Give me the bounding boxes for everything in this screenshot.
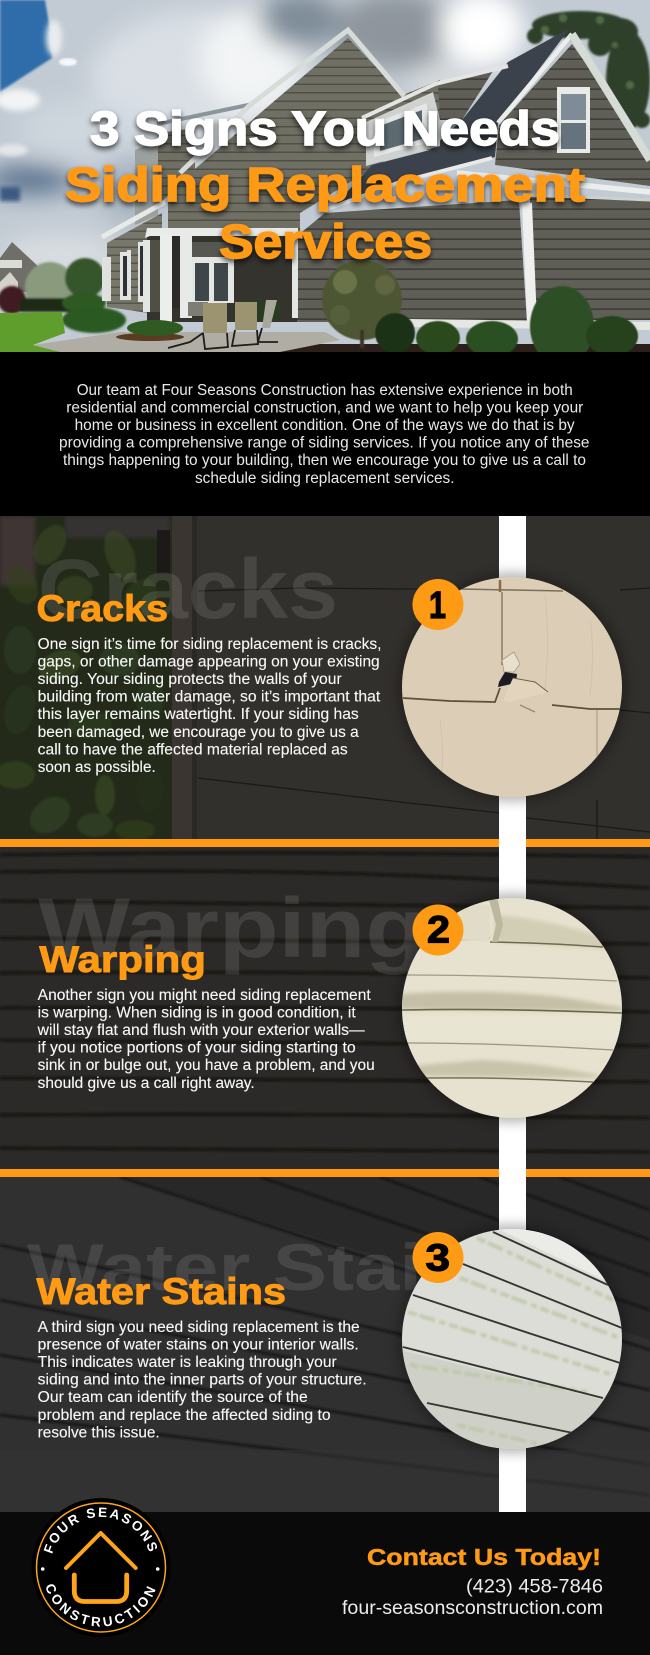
ghost heading: Warping: Warping xyxy=(38,881,425,975)
ghost heading: Water Stains: Water Stains xyxy=(27,1230,517,1304)
text block: cracks body: siding. Your siding protects the walls of your xyxy=(38,671,342,688)
text block: warping body: should give us a call right away. xyxy=(38,1075,255,1092)
text block: cracks body: One sign it’s time for siding replacement is cracks, xyxy=(38,636,381,653)
right gable wall xyxy=(495,44,650,186)
panel: cracks background xyxy=(0,516,650,841)
title: Services xyxy=(219,216,432,269)
panel: intro: Our team at Four Seasons Construction has extensive experience in both xyxy=(77,382,573,399)
lower left wall xyxy=(107,213,162,315)
background trees and shrubs xyxy=(0,258,126,333)
panel: intro: residential and commercial construction, and we want to help you keep your xyxy=(66,400,583,416)
orange divider 2 xyxy=(0,1169,650,1177)
text block: warping body: sink in or bulge out, you have a problem, and you xyxy=(38,1057,375,1074)
logo: Four Seasons Construction: CONSTRUCTION xyxy=(46,1584,156,1627)
text block: warping body xyxy=(37,987,375,1092)
text block: cracks body: gaps, or other damage appearing on your existing xyxy=(38,654,380,671)
text block: cracks body: this layer remains watertight. If your siding has xyxy=(38,706,359,723)
number badge 2: 2 xyxy=(427,910,450,952)
logo: Four Seasons Construction xyxy=(32,1498,170,1637)
text block: cracks body xyxy=(38,636,381,776)
porch xyxy=(102,228,298,322)
number badge 1: 1 xyxy=(429,585,446,627)
upper left wing wall and roofline xyxy=(135,104,253,225)
number badge 1 xyxy=(412,579,464,630)
panel: footer xyxy=(0,1512,650,1655)
landscaping shrubs xyxy=(322,260,639,352)
panel: intro: providing a comprehensive range of siding services. If you notice any of these xyxy=(59,435,590,452)
dormer front and window xyxy=(366,92,440,166)
number badge 3: 3 xyxy=(426,1238,450,1280)
dormer wall xyxy=(438,72,493,120)
panel: warping background xyxy=(0,847,650,1169)
title: Siding Replacement xyxy=(65,159,585,212)
icon: house xyxy=(66,1533,136,1602)
panel: cracks text xyxy=(36,588,381,776)
text block: water stains body: siding and into the inner parts of your structure. xyxy=(38,1372,367,1389)
panel: intro: schedule siding replacement services. xyxy=(195,470,454,487)
contact heading: Contact Us Today! xyxy=(367,1544,601,1570)
text block: water stains body: This indicates water is leaking through your xyxy=(38,1354,337,1371)
grass xyxy=(0,312,65,352)
text block: cracks body: call to have the affected material replaced as xyxy=(38,741,348,758)
circle photo: warped siding xyxy=(398,894,626,1122)
phone number: (423) 458-7846 xyxy=(466,1576,603,1598)
patio furniture xyxy=(168,300,278,349)
text block: cracks body: been damaged, we encourage you to give us a xyxy=(38,724,359,741)
distant house xyxy=(0,242,40,292)
logo: Four Seasons Construction: FOUR SEASONS xyxy=(44,1508,157,1554)
text block: warping body: is warping. When siding is in good condition, it xyxy=(38,1005,356,1022)
mulch and patio xyxy=(33,320,650,352)
text block: water stains body: Our team can identify the source of the xyxy=(38,1389,308,1406)
text block: warping body: Another sign you might need siding replacement xyxy=(38,987,371,1004)
heading: Warping: Warping xyxy=(39,939,206,980)
text block: water stains body: A third sign you need siding replacement is the xyxy=(38,1319,360,1336)
title: 3 Signs You Needs xyxy=(90,103,560,156)
number badge 3 xyxy=(412,1232,464,1283)
hero photo: house with grey siding xyxy=(0,0,650,366)
tree xyxy=(527,11,650,130)
text block: cracks body: building from water damage, so it’s important that xyxy=(38,689,381,706)
title xyxy=(65,103,585,269)
panel: intro: home or business in excellent condition. One of the ways we do that is by xyxy=(75,417,575,434)
ghost heading: Cracks: Cracks xyxy=(38,542,338,636)
text block: water stains body xyxy=(38,1319,367,1441)
orange divider 1 xyxy=(0,839,650,847)
panel: intro: things happening to your building, then we encourage you to give us a call to xyxy=(63,452,586,469)
panel: warping text xyxy=(37,939,375,1092)
heading: Water Stains: Water Stains xyxy=(36,1271,286,1312)
text block: water stains body: resolve this issue. xyxy=(38,1424,160,1441)
main gable wall xyxy=(168,38,440,232)
text block: cracks body: soon as possible. xyxy=(38,759,156,776)
white vertical timeline bar xyxy=(499,516,526,1512)
text block: water stains body: presence of water stains on your interior walls. xyxy=(38,1337,359,1354)
panel: water stains text xyxy=(36,1271,367,1441)
circle photo: stained siding xyxy=(398,1225,626,1460)
white roof and corner trim xyxy=(102,30,650,326)
panel: intro xyxy=(0,352,650,516)
text block: water stains body: problem and replace the affected siding to xyxy=(38,1407,331,1424)
sky and clouds xyxy=(0,0,524,277)
text block: warping body: will stay flat and flush with your exterior walls— xyxy=(37,1022,365,1039)
lower walls xyxy=(297,197,650,322)
number badge 2 xyxy=(412,904,464,956)
text block: warping body: if you notice portions of your siding starting to xyxy=(38,1040,356,1057)
gable window xyxy=(557,87,590,153)
foliage xyxy=(0,519,164,841)
panel: water stains background xyxy=(0,1177,650,1512)
website: four-seasonsconstruction.com xyxy=(342,1597,603,1619)
circle photo: cracked siding xyxy=(398,573,626,801)
dark roof xyxy=(335,28,570,205)
heading: Cracks: Cracks xyxy=(36,588,168,629)
